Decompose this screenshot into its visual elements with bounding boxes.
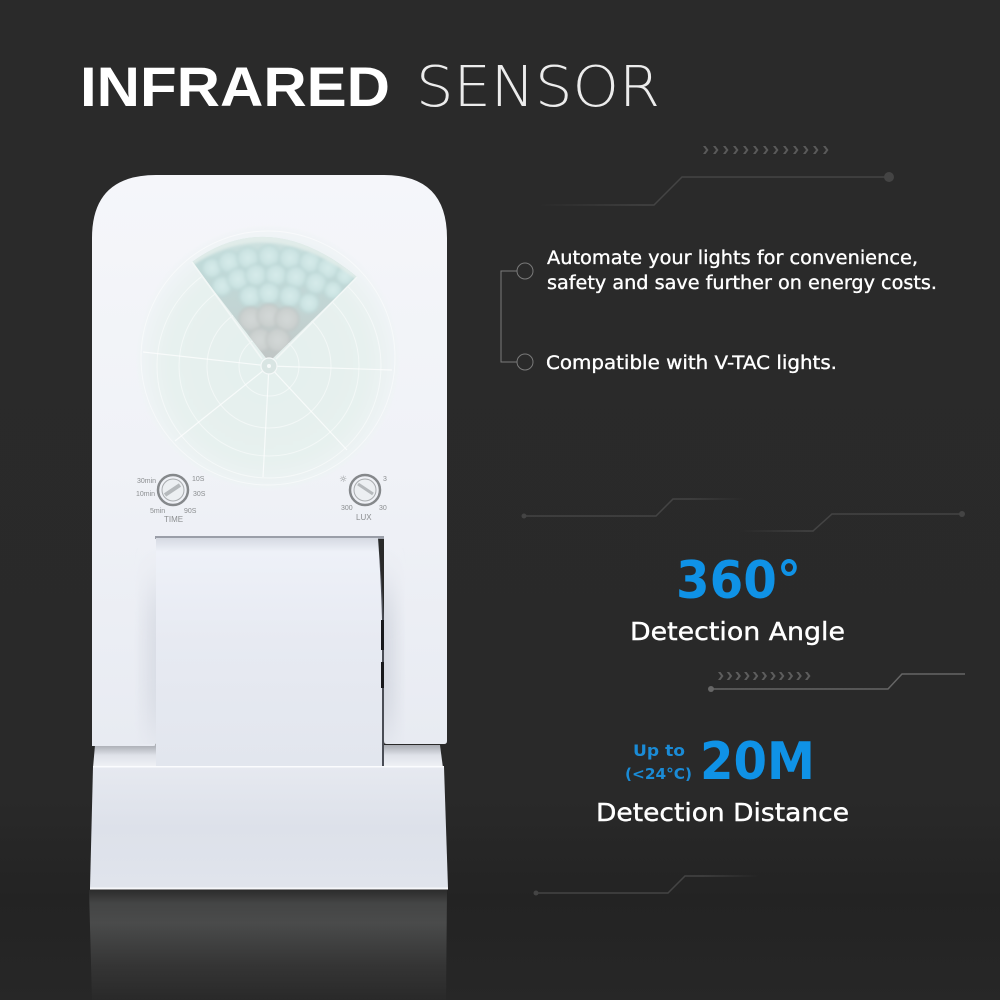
- stat: detection angle: [630, 551, 845, 646]
- TIME dial: [136, 475, 206, 524]
- TIME dial: 5min: [150, 508, 165, 515]
- LUX dial: 30: [379, 505, 387, 512]
- PIR lens dome: [143, 236, 392, 477]
- stat: detection angle: 360°: [676, 551, 801, 611]
- circuit lines: middle: [522, 499, 965, 531]
- title: [80, 55, 660, 120]
- feature text: automate: Automate your lights for convenience,: [547, 248, 918, 269]
- TIME dial: 10S: [192, 476, 205, 483]
- circuit line: bottom: [534, 876, 758, 896]
- stat: detection distance: (<24°C): [625, 765, 692, 783]
- TIME dial: 10min: [136, 491, 155, 498]
- TIME dial: 30S: [193, 491, 206, 498]
- feature text: automate: [547, 248, 937, 294]
- feature text: automate: safety and save further on energy costs.: [547, 273, 937, 294]
- see-through wedge with honeycomb lens: [192, 237, 357, 358]
- LUX dial: 3: [383, 476, 387, 483]
- LUX dial: ☼: [339, 475, 347, 485]
- floor reflection of sensor: [89, 890, 447, 1000]
- mounting shelf behind base: [93, 745, 443, 768]
- base bottom highlight: [90, 888, 448, 890]
- LUX dial: [339, 475, 387, 522]
- TIME dial: 30min: [137, 478, 156, 485]
- wedge outline and hub: [192, 262, 357, 359]
- stat: detection distance: 20M: [700, 732, 815, 792]
- sensor device: [90, 175, 448, 890]
- feature text: compatible: Compatible with V-TAC lights.: [546, 353, 837, 374]
- TIME dial: 90S: [184, 508, 197, 515]
- lens ring outlines: [141, 231, 395, 485]
- feature list connector: [501, 263, 533, 370]
- TIME dial: TIME: [164, 515, 183, 524]
- title: SENSOR: [416, 55, 660, 120]
- stat: detection distance: [596, 732, 849, 827]
- circuit line with chevrons: top: [536, 146, 894, 205]
- title: INFRARED: [80, 55, 390, 118]
- LUX dial: LUX: [356, 513, 372, 522]
- base top highlight: [93, 766, 444, 768]
- back plate: [92, 175, 447, 746]
- base block: [90, 767, 448, 888]
- circuit line with chevrons: lower: [708, 672, 965, 692]
- swivel arm: [155, 536, 384, 768]
- stat: detection distance: Detection Distance: [596, 798, 849, 827]
- stat: detection distance: Up to: [633, 741, 685, 760]
- stat: detection angle: Detection Angle: [630, 617, 845, 646]
- soft shade beside arm: [134, 590, 406, 730]
- LUX dial: 300: [341, 505, 353, 512]
